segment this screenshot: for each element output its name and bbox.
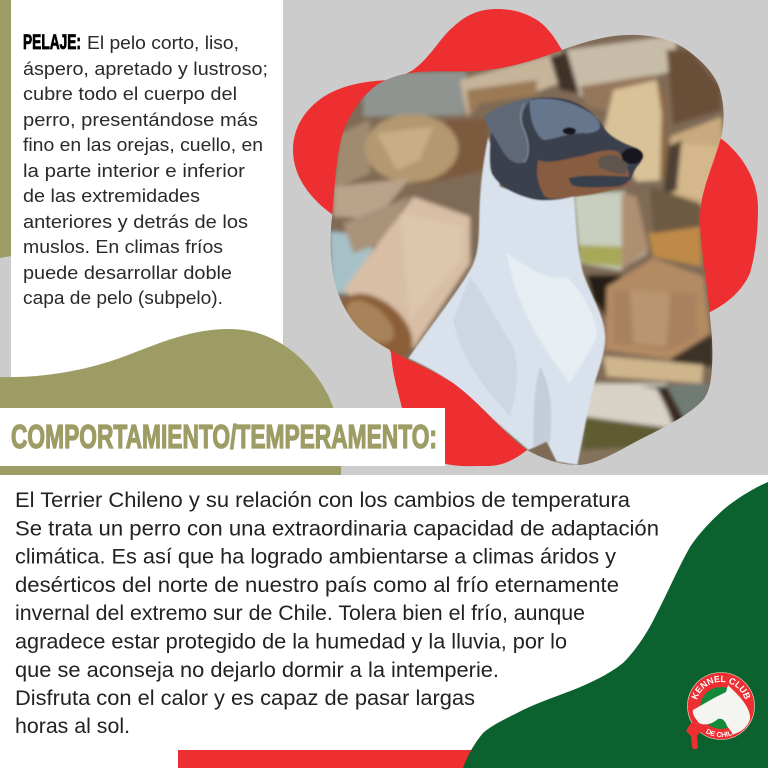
logo lettering: DE CHILE — [706, 728, 736, 738]
logo ribbon — [686, 721, 701, 749]
text: pelaje description: puede desarrollar doble — [23, 262, 232, 283]
logo lettering — [691, 676, 750, 738]
text: temperature behaviour: horas al sol. — [15, 715, 130, 738]
text: pelaje description: de las extremidades — [23, 185, 200, 206]
heading: comportamiento — [0, 408, 445, 466]
text: temperature behaviour: agradece estar protegido de la humedad y la lluvia, por lo — [15, 630, 567, 654]
text: pelaje description: fino en las orejas, cuello, en — [23, 134, 263, 155]
panel: pelaje — [11, 0, 283, 382]
green wave corner — [463, 482, 768, 768]
text: pelaje description: muslos. En climas fríos — [23, 236, 223, 257]
text: temperature behaviour: Se trata un perro con una extraordinaria capacidad de adaptación — [15, 518, 659, 540]
text: pelaje description: El pelo corto, liso, — [87, 32, 239, 53]
olive wave behind heading — [0, 329, 341, 475]
red bottom bar — [178, 750, 478, 768]
dog — [408, 97, 643, 465]
text: pelaje description: PELAJE: — [23, 31, 81, 54]
text: pelaje description: cubre todo el cuerpo del — [23, 83, 237, 104]
red blob behind photo — [293, 9, 758, 466]
text: temperature behaviour: El Terrier Chileno y su relación con los cambios de temperatura — [15, 489, 630, 512]
olive side strip — [0, 0, 11, 258]
text: pelaje description: áspero, apretado y lustroso; — [23, 58, 268, 79]
dog muzzle — [537, 150, 629, 199]
text: pelaje description: perro, presentándose más — [23, 109, 258, 130]
text: pelaje description: anteriores y detrás de los — [23, 211, 248, 232]
dog head — [490, 97, 642, 200]
white lower panel — [0, 475, 768, 768]
grey background — [0, 0, 768, 475]
dog eye — [563, 127, 576, 135]
heading: comportamiento: COMPORTAMIENTO/TEMPERAMENTO: — [11, 418, 437, 455]
dog body — [408, 137, 605, 465]
text: pelaje description — [23, 31, 268, 308]
text: temperature behaviour: invernal del extremo sur de Chile. Tolera bien el frío, aunque — [15, 602, 585, 625]
dog nose — [622, 148, 643, 164]
logo lettering: KENNEL CLUB — [691, 676, 750, 700]
dog ear — [485, 97, 533, 163]
text: temperature behaviour: Disfruta con el calor y es capaz de pasar largas — [15, 687, 475, 710]
text: temperature behaviour: desérticos del norte de nuestro país como al frío eternamente — [15, 574, 619, 597]
text: temperature behaviour: climática. Es así que ha logrado ambientarse a climas áridos y — [15, 546, 617, 568]
logo dog head — [693, 685, 750, 734]
text: temperature behaviour — [15, 489, 659, 738]
photo: dog in front of firewood — [320, 27, 740, 473]
text: temperature behaviour: que se aconseja no dejarlo dormir a la intemperie. — [15, 659, 499, 682]
logo: Kennel Club de Chile — [686, 672, 755, 750]
text: pelaje description: capa de pelo (subpelo). — [23, 287, 223, 308]
text: pelaje description: la parte interior e inferior — [23, 160, 245, 181]
photo backdrop and firewood — [320, 27, 740, 473]
